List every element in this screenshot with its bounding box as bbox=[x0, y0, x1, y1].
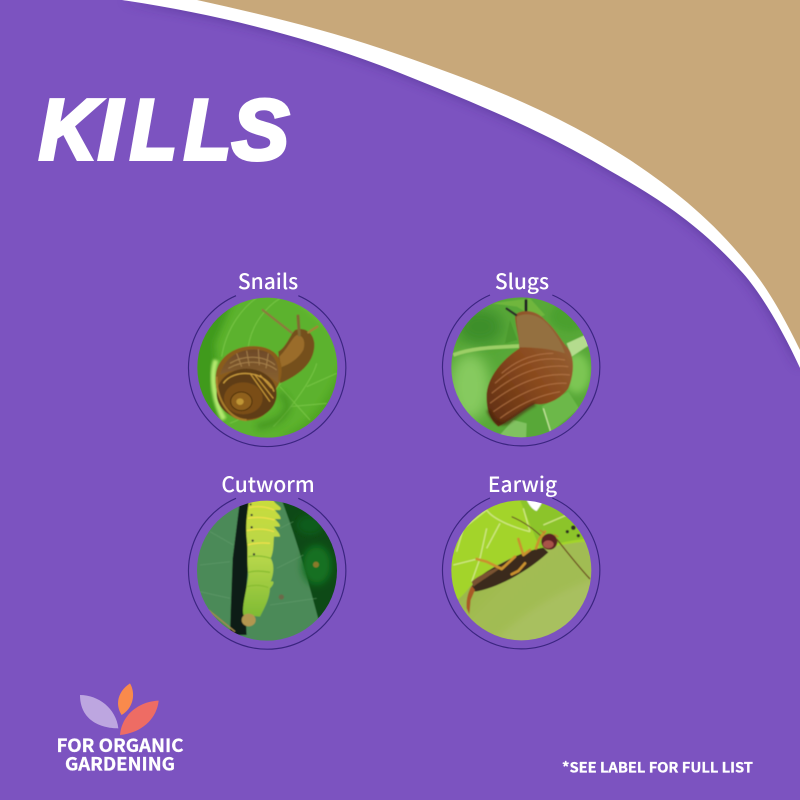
body bbox=[278, 329, 314, 383]
footnote: *SEE LABEL FOR FULL LIST bbox=[562, 758, 753, 778]
label: snails: Snails bbox=[238, 266, 298, 296]
logo text: FOR ORGANIC bbox=[56, 732, 184, 758]
title: I bbox=[98, 83, 124, 178]
title: K bbox=[39, 83, 102, 178]
photo: snail bbox=[188, 293, 346, 447]
photo: cutworm bbox=[188, 497, 346, 649]
logo: for organic gardening: GARDENING bbox=[65, 750, 175, 776]
label: slugs: Slugs bbox=[495, 266, 549, 296]
photo: earwig bbox=[442, 497, 600, 649]
title bbox=[39, 83, 289, 178]
slug body bbox=[487, 311, 573, 427]
icon: three leaves bbox=[80, 683, 159, 735]
shell bbox=[216, 346, 282, 421]
caterpillar bbox=[243, 500, 281, 617]
curved corner band bbox=[122, 0, 800, 368]
title: L bbox=[130, 83, 177, 178]
label: earwig: Earwig bbox=[488, 469, 557, 499]
label: cutworm: Cutworm bbox=[221, 469, 315, 499]
photo: slug bbox=[442, 293, 600, 446]
title: S bbox=[232, 83, 289, 178]
insect bbox=[472, 548, 548, 592]
logo: for organic gardening bbox=[56, 683, 184, 776]
title: L bbox=[184, 83, 231, 178]
